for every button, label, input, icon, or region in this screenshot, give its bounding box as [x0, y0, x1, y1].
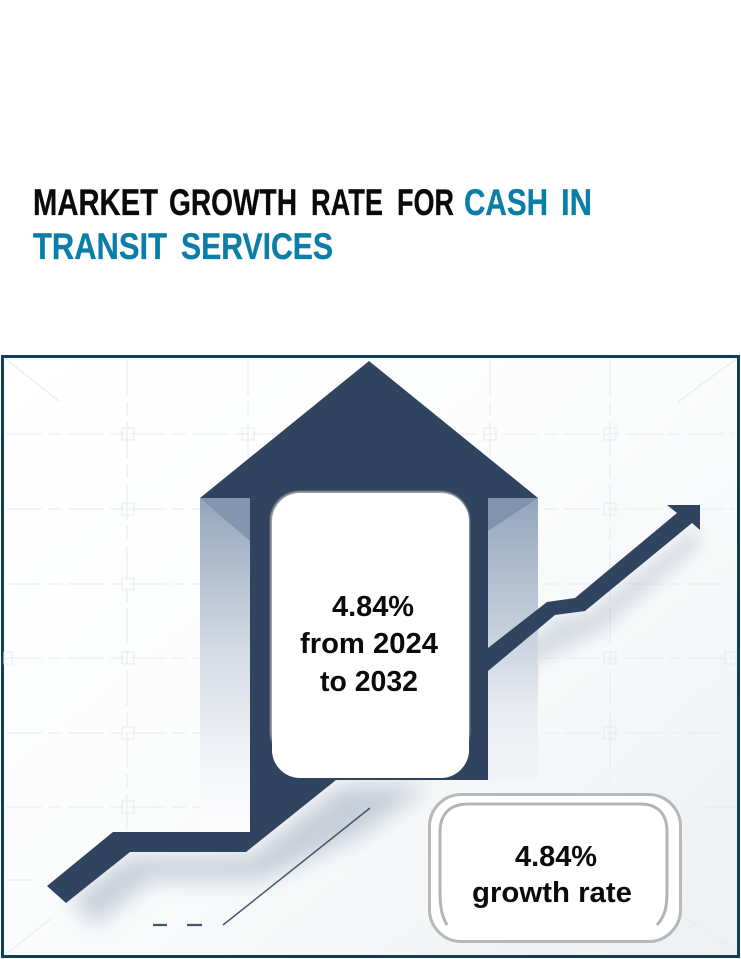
callout: main: from 2024 [300, 628, 438, 660]
thin trend line with dashes [153, 808, 370, 925]
callout: growth rate [430, 794, 680, 942]
arrow column: right light side [488, 498, 538, 780]
background grid [4, 359, 736, 954]
callout: main [270, 491, 470, 778]
panel: chart frame [2, 356, 738, 956]
shadow under chart line [70, 528, 700, 925]
title: RATE [311, 182, 383, 223]
title: MARKET [33, 182, 158, 223]
rising arrow: tail and house-shaped head [47, 361, 538, 903]
callout: main: to 2032 [320, 666, 418, 698]
title: TRANSIT [33, 226, 167, 267]
callout: growth rate: 4.84% [515, 841, 597, 873]
title: CASH [464, 182, 548, 223]
title [33, 182, 592, 267]
arrow column: left light side [200, 498, 250, 832]
callout: growth rate: growth rate [472, 877, 632, 909]
callout: main: 4.84% [332, 591, 414, 623]
arrow: rising line with arrowhead [488, 505, 700, 671]
title: GROWTH [169, 182, 297, 223]
title: IN [561, 182, 592, 223]
title: FOR [397, 182, 454, 223]
title: SERVICES [181, 226, 333, 267]
